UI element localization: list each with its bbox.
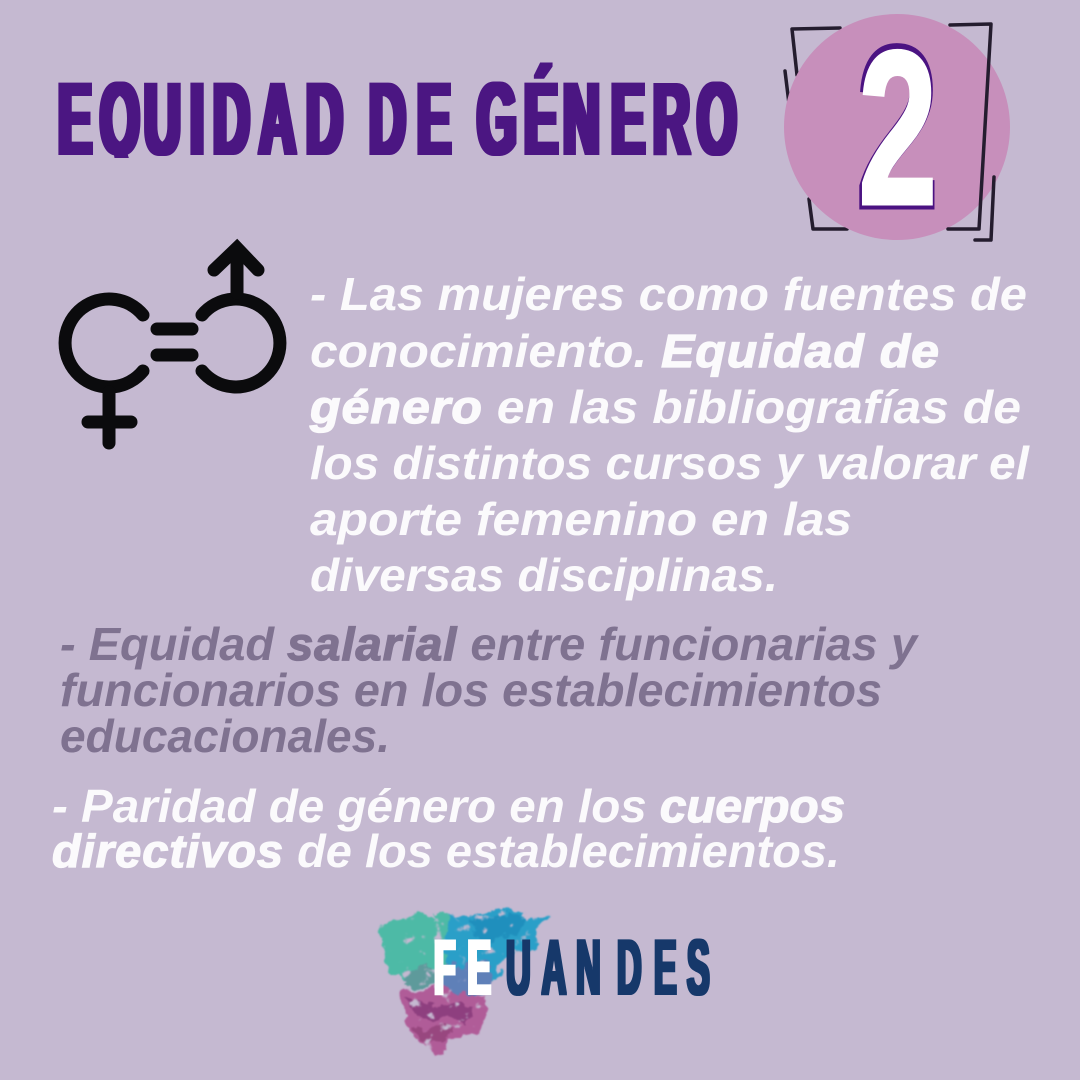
badge: number 2 xyxy=(784,0,1010,258)
watercolor splash xyxy=(380,910,545,1054)
text block: first point: aporte femenino en las xyxy=(310,493,852,545)
text block: third point: - Paridad de género en los cuerpos xyxy=(52,780,845,832)
logo: FEUANDES xyxy=(380,910,710,1054)
frame behind circle xyxy=(785,28,847,229)
text block: first point xyxy=(309,268,1030,601)
text block: second point: educacionales. xyxy=(60,710,390,762)
text block: second point xyxy=(60,618,919,762)
title: EQUIDAD DE GÉNERO xyxy=(58,62,737,177)
wordmark FE: FE xyxy=(434,923,491,1011)
text block: first point: los distintos cursos y valorar el xyxy=(310,437,1030,489)
frame in front of circle xyxy=(948,24,994,240)
text block: first point: diversas disciplinas. xyxy=(310,549,778,601)
number shadow: 2 xyxy=(855,0,940,258)
icon: gender equality xyxy=(65,248,280,443)
text block: second point: funcionarios en los establecimientos xyxy=(60,664,882,716)
wordmark UANDES: UANDES xyxy=(506,923,710,1011)
circle xyxy=(784,14,1010,240)
text block: second point: - Equidad salarial entre funcionarias y xyxy=(60,618,919,670)
text block: third point: directivos de los establecimientos. xyxy=(52,825,840,877)
text block: first point: - Las mujeres como fuentes de xyxy=(310,268,1027,320)
text block: first point: género en las bibliografías de xyxy=(309,381,1021,433)
number: 2 xyxy=(858,6,938,251)
text block: first point: conocimiento. Equidad de xyxy=(310,325,940,377)
text block: third point xyxy=(52,780,845,877)
